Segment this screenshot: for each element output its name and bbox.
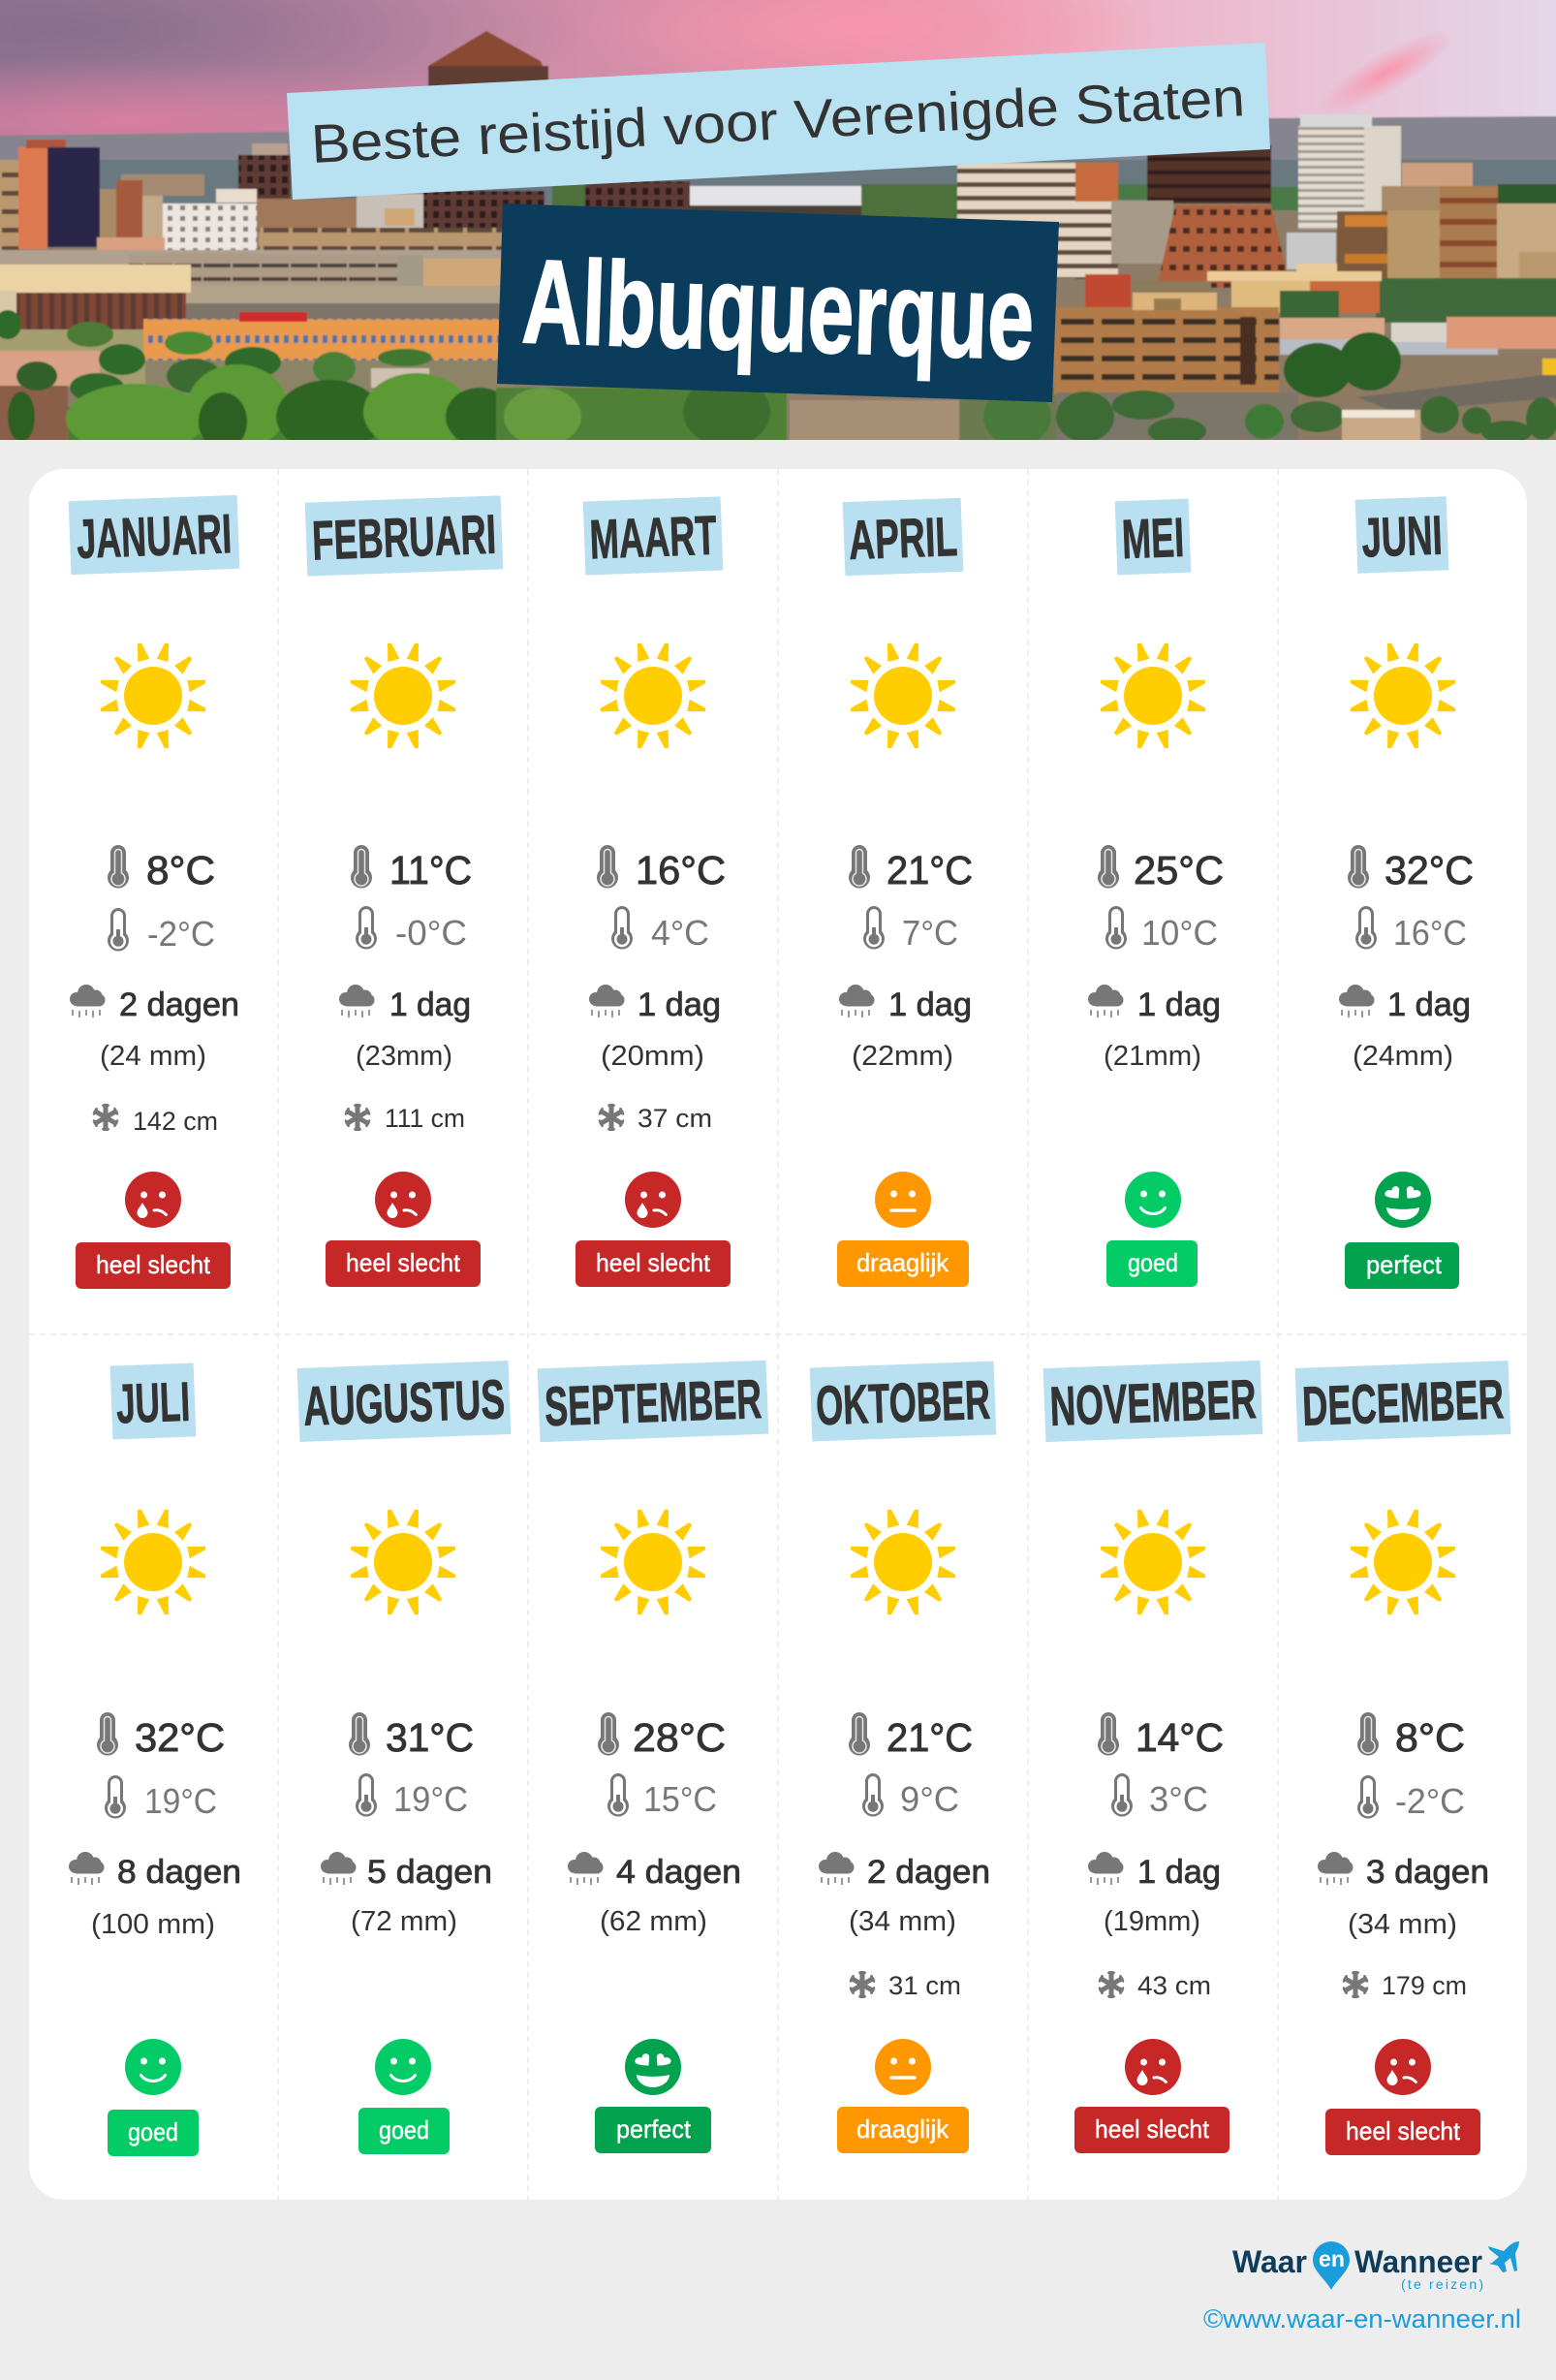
- rain days: [69, 1852, 241, 1891]
- max temperature: 14°C: [1136, 1715, 1224, 1760]
- rating badge: heel slecht: [596, 1248, 711, 1277]
- title banner: Beste reistijd voor Verenigde Staten: Beste reistijd voor Verenigde Staten: [309, 66, 1246, 174]
- rainfall: (20mm): [601, 1041, 704, 1072]
- icon: sun: [1101, 1510, 1205, 1614]
- icon: sun: [601, 1510, 705, 1614]
- rain days: [1318, 1852, 1489, 1891]
- icon: map pin: [1313, 2241, 1350, 2290]
- rainfall: (34 mm): [849, 1906, 956, 1937]
- max temperature: [1098, 845, 1224, 892]
- rating badge: [108, 2110, 199, 2156]
- max temperature: 32°C: [135, 1715, 225, 1760]
- logo: Waar en Wanneer: (te reizen): [1401, 2276, 1483, 2292]
- rainfall: (21mm): [1104, 1041, 1201, 1072]
- min temperature: 10°C: [1141, 913, 1218, 953]
- min temperature: [863, 906, 958, 953]
- min temperature: -0°C: [395, 913, 467, 953]
- min temperature: [607, 1773, 717, 1819]
- rain days: [568, 1852, 741, 1891]
- rating badge: heel slecht: [346, 1248, 461, 1277]
- rain days: 5 dagen: [367, 1854, 492, 1891]
- min temperature: 15°C: [643, 1779, 717, 1819]
- min temperature: 9°C: [900, 1779, 959, 1819]
- max temperature: [598, 1712, 726, 1760]
- rain days: 1 dag: [1137, 1854, 1221, 1891]
- panel: monthly climate card: [29, 469, 1527, 2200]
- rain days: 3 dagen: [1366, 1854, 1489, 1891]
- icon: sun: [851, 643, 955, 748]
- icon: sun: [1101, 643, 1205, 748]
- rain days: [839, 985, 972, 1023]
- max temperature: 21°C: [887, 1715, 973, 1760]
- month: september: [538, 1361, 768, 2153]
- heading: juni: JUNI: [1360, 504, 1444, 569]
- icon: sun: [1351, 643, 1455, 748]
- logo: Waar en Wanneer: Wanneer: [1354, 2244, 1482, 2279]
- month: februari: [305, 495, 503, 1287]
- rainfall: (62 mm): [600, 1906, 707, 1937]
- min temperature: 19°C: [144, 1781, 217, 1821]
- rating badge: [1074, 2107, 1229, 2153]
- icon: map pin: en: [1319, 2246, 1345, 2271]
- rainfall: (72 mm): [351, 1906, 457, 1937]
- heading: augustus: AUGUSTUS: [302, 1368, 506, 1438]
- month: maart: [576, 496, 731, 1287]
- rating face: [375, 2039, 431, 2095]
- max temperature: [1348, 845, 1474, 892]
- rain days: [339, 985, 471, 1023]
- rating badge: goed: [128, 2117, 178, 2146]
- rating badge: heel slecht: [1346, 2116, 1461, 2145]
- max temperature: [849, 1712, 973, 1760]
- max temperature: 16°C: [636, 848, 726, 892]
- rating face: [1375, 1172, 1431, 1228]
- rating badge: goed: [1128, 1248, 1178, 1277]
- snowfall: 111 cm: [385, 1104, 465, 1133]
- rain days: 1 dag: [1387, 986, 1471, 1023]
- month: april: [837, 498, 973, 1287]
- heading: februari: FEBRUARI: [311, 504, 497, 572]
- rating face: [1125, 1172, 1181, 1228]
- max temperature: 32°C: [1385, 848, 1474, 892]
- heading: mei: [1115, 499, 1191, 575]
- rating face: [375, 1172, 431, 1228]
- max temperature: 25°C: [1134, 848, 1224, 892]
- rating face: [625, 1172, 681, 1228]
- rainfall: (34 mm): [1348, 1909, 1457, 1940]
- min temperature: [105, 1775, 217, 1821]
- rain days: [1088, 1852, 1221, 1891]
- min temperature: 19°C: [393, 1779, 468, 1819]
- rain days: 4 dagen: [616, 1854, 741, 1891]
- icon: sun: [101, 1510, 205, 1614]
- rating face: [125, 1172, 181, 1228]
- rain days: 2 dagen: [867, 1854, 990, 1891]
- rating face: [1375, 2039, 1431, 2095]
- min temperature: [1357, 1775, 1465, 1821]
- rating badge: [837, 1240, 969, 1287]
- heading: maart: [583, 496, 723, 576]
- logo: Waar en Wanneer: [1232, 2241, 1519, 2292]
- rain days: [321, 1852, 492, 1891]
- min temperature: 16°C: [1393, 913, 1467, 953]
- heading: juni: [1355, 496, 1448, 574]
- snowfall: 31 cm: [888, 1971, 961, 2000]
- heading: november: [1043, 1361, 1262, 1442]
- max temperature: 21°C: [887, 848, 973, 892]
- rainfall: (100 mm): [91, 1909, 215, 1940]
- rating badge: [1325, 2109, 1480, 2155]
- month: juni: [1339, 496, 1474, 1289]
- header photo: Albuquerque skyline at dusk: [0, 0, 1556, 454]
- month: november: [1043, 1361, 1262, 2153]
- rating badge: [326, 1240, 481, 1287]
- min temperature: 3°C: [1149, 1779, 1208, 1819]
- heading: maart: MAART: [588, 505, 718, 571]
- min temperature: [1355, 906, 1467, 953]
- rating badge: [595, 2107, 711, 2153]
- max temperature: 8°C: [146, 848, 215, 892]
- month: augustus: [297, 1361, 511, 2154]
- max temperature: [597, 845, 726, 892]
- rainfall: (24 mm): [100, 1041, 206, 1072]
- max temperature: [108, 845, 215, 892]
- heading: april: APRIL: [848, 506, 958, 572]
- icon: sun: [851, 1510, 955, 1614]
- snowfall: [599, 1104, 712, 1133]
- logo: Waar en Wanneer: Waar: [1232, 2244, 1307, 2279]
- rating badge: goed: [379, 2115, 429, 2145]
- max temperature: [351, 845, 472, 892]
- rating face: [875, 1172, 931, 1228]
- heading: januari: JANUARI: [76, 503, 233, 571]
- icon: airplane: [1488, 2241, 1519, 2272]
- max temperature: [97, 1712, 225, 1760]
- rating face: [625, 2039, 681, 2095]
- rating badge: draaglijk: [856, 2114, 949, 2144]
- title banner: Beste reistijd voor Verenigde Staten: [287, 43, 1270, 200]
- city banner: Albuquerque: Albuquerque: [520, 235, 1036, 385]
- rating badge: [1345, 1242, 1459, 1289]
- icon: sun: [351, 1510, 455, 1614]
- rainfall: (23mm): [356, 1041, 452, 1072]
- min temperature: 7°C: [902, 913, 958, 953]
- rain days: 1 dag: [638, 986, 721, 1023]
- min temperature: -2°C: [1395, 1781, 1465, 1821]
- rating badge: perfect: [1366, 1250, 1443, 1279]
- icon: sun: [1351, 1510, 1455, 1614]
- month: mei: [1088, 499, 1224, 1287]
- rain days: 1 dag: [1137, 986, 1221, 1023]
- min temperature: [1105, 906, 1218, 953]
- heading: juli: JULI: [115, 1371, 191, 1435]
- rating badge: heel slecht: [96, 1250, 211, 1279]
- rain days: 1 dag: [888, 986, 972, 1023]
- heading: april: [843, 498, 963, 576]
- snowfall: [93, 1104, 218, 1136]
- max temperature: 31°C: [386, 1715, 474, 1760]
- snowfall: [1343, 1971, 1467, 2000]
- max temperature: [1098, 1712, 1224, 1760]
- rating badge: [576, 1240, 731, 1287]
- rating face: [125, 2039, 181, 2095]
- icon: sun: [351, 643, 455, 748]
- rating badge: heel slecht: [1095, 2114, 1210, 2144]
- rain days: 2 dagen: [119, 986, 239, 1023]
- rating badge: [837, 2107, 969, 2153]
- city banner: Albuquerque: [497, 204, 1059, 402]
- month: december: [1295, 1361, 1510, 2155]
- heading: juli: [110, 1362, 196, 1440]
- max temperature: [349, 1712, 474, 1760]
- min temperature: [356, 906, 467, 953]
- rain days: 1 dag: [389, 986, 471, 1023]
- snowfall: 142 cm: [133, 1107, 218, 1136]
- month: oktober: [810, 1362, 996, 2153]
- heading: mei: MEI: [1121, 507, 1185, 571]
- heading: augustus: [297, 1361, 511, 1442]
- max temperature: [1357, 1712, 1465, 1760]
- icon: sun: [101, 643, 205, 748]
- rain days: 8 dagen: [117, 1854, 241, 1891]
- rating badge: perfect: [616, 2114, 692, 2144]
- icon: sun: [601, 643, 705, 748]
- min temperature: -2°C: [147, 914, 215, 954]
- heading: oktober: [810, 1362, 996, 1441]
- rain days: [819, 1852, 990, 1891]
- heading: januari: [69, 495, 239, 575]
- snowfall: 37 cm: [638, 1104, 712, 1133]
- heading: november: NOVEMBER: [1048, 1368, 1258, 1438]
- snowfall: [850, 1971, 961, 2000]
- rain days: [1339, 985, 1471, 1023]
- heading: februari: [305, 495, 503, 577]
- max temperature: 8°C: [1395, 1715, 1465, 1760]
- rating badge: [76, 1242, 231, 1289]
- rain days: [1088, 985, 1221, 1023]
- heading: oktober: OKTOBER: [815, 1369, 991, 1437]
- rainfall: (22mm): [852, 1041, 953, 1072]
- rainfall: (19mm): [1104, 1906, 1200, 1937]
- max temperature: [849, 845, 973, 892]
- heading: september: [538, 1361, 768, 1442]
- rain days: [70, 985, 239, 1023]
- snowfall: 179 cm: [1382, 1971, 1467, 2000]
- snowfall: [345, 1104, 465, 1133]
- rating badge: [1106, 1240, 1198, 1287]
- rating face: [875, 2039, 931, 2095]
- min temperature: [1111, 1773, 1208, 1819]
- rating badge: draaglijk: [856, 1248, 949, 1277]
- snowfall: 43 cm: [1137, 1971, 1211, 2000]
- rating badge: [358, 2108, 450, 2154]
- source url: ©www.waar-en-wanneer.nl: [1203, 2304, 1521, 2333]
- snowfall: [1099, 1971, 1211, 2000]
- month: januari: [69, 495, 239, 1289]
- min temperature: [108, 908, 215, 954]
- min temperature: [862, 1773, 959, 1819]
- min temperature: [611, 906, 709, 953]
- min temperature: 4°C: [651, 913, 709, 953]
- month: juli: [69, 1362, 241, 2156]
- rating face: [1125, 2039, 1181, 2095]
- max temperature: 28°C: [633, 1715, 726, 1760]
- max temperature: 11°C: [389, 848, 472, 892]
- heading: september: SEPTEMBER: [544, 1368, 762, 1438]
- min temperature: [356, 1773, 468, 1819]
- rain days: [589, 985, 721, 1023]
- rainfall: (24mm): [1353, 1041, 1453, 1072]
